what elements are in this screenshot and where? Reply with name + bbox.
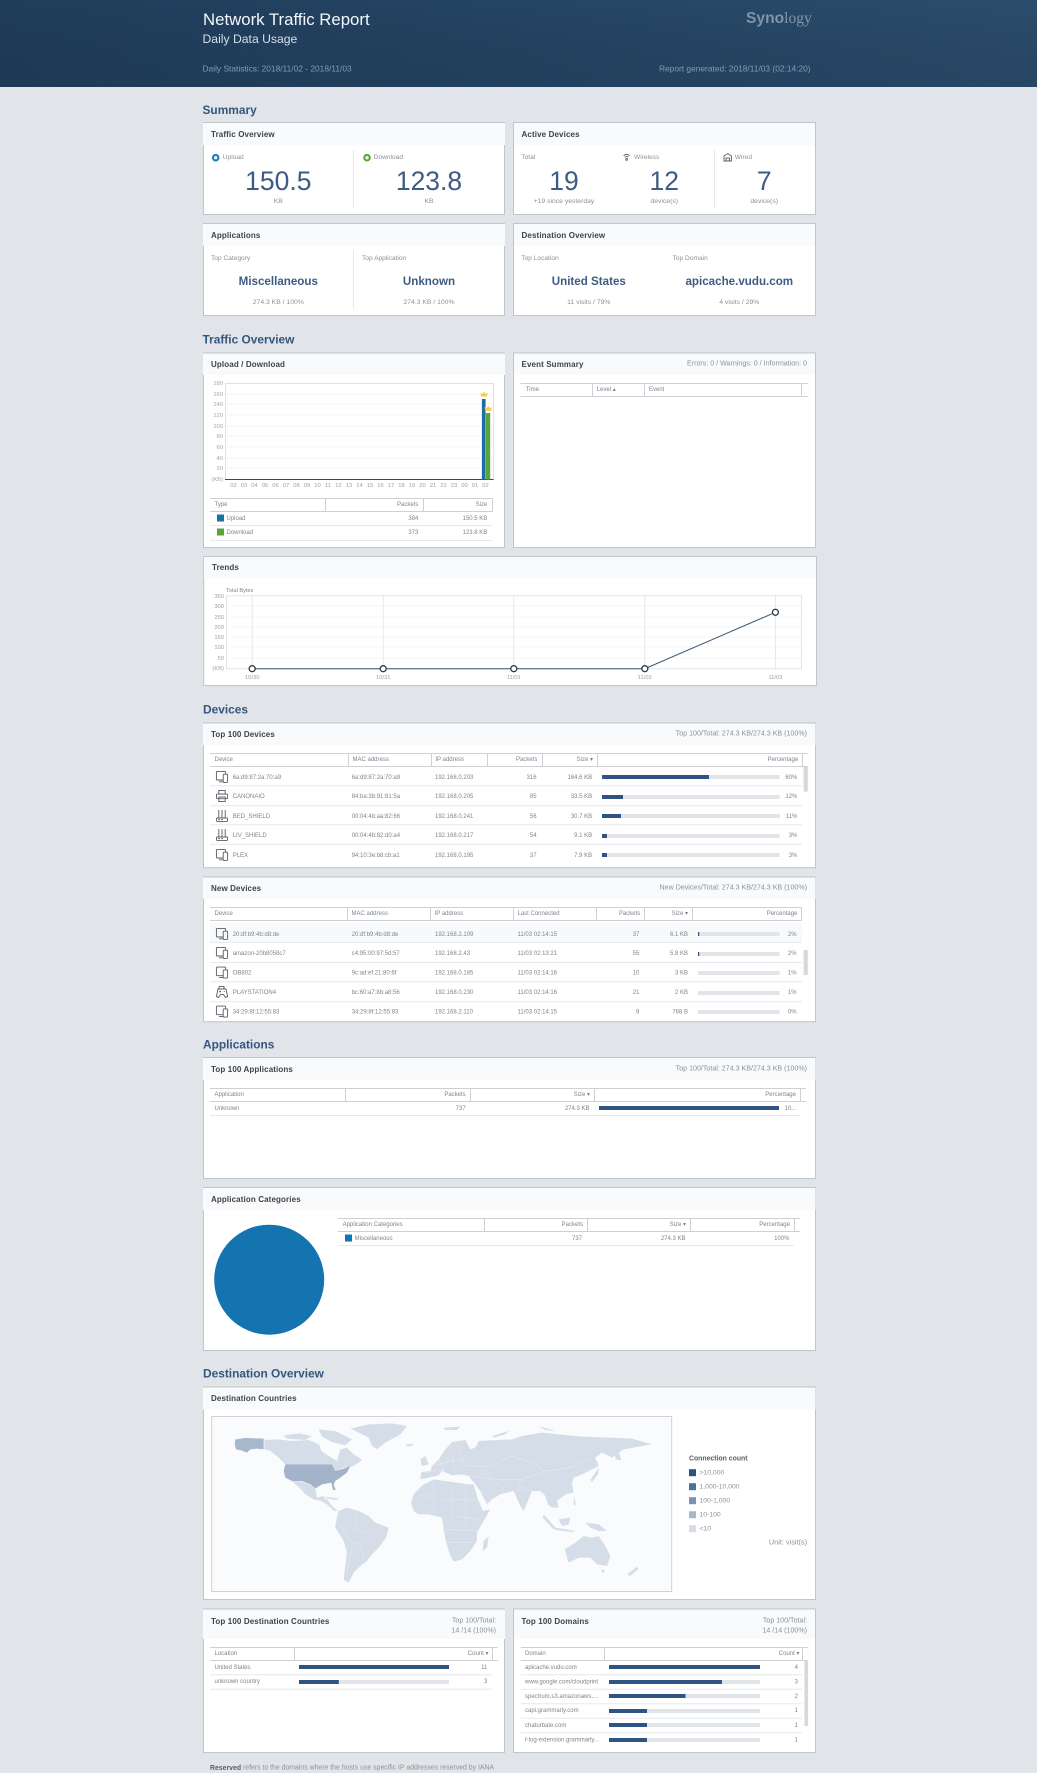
bar chart: upload and download: 60: [217, 445, 223, 451]
table: categories: Application Categories: [343, 1222, 403, 1228]
table: applications: [210, 1088, 806, 1116]
panel: Application Categories: [203, 1188, 816, 1350]
row: 20:df:b9:4b:d8:de: 20:df:b9:4b:d8:de: [233, 932, 280, 938]
row: 34:29:8f:12:55:83: 9: [636, 1010, 640, 1016]
table: domains: 1: [795, 1737, 799, 1743]
bar chart: upload and download: 16: [377, 483, 384, 489]
table: new devices: Percentage: [767, 911, 798, 917]
table: countries: 11: [481, 1665, 488, 1671]
bar chart: upload and download: 180: [213, 381, 223, 387]
bar chart: upload and download: [211, 381, 494, 489]
row: 6a:d9:87:2a:70:a9: 164.6 KB: [568, 775, 592, 781]
bar chart: upload and download: 160: [213, 392, 223, 398]
table: countries: United States: [214, 1665, 251, 1671]
table: countries: Location: [214, 1651, 237, 1657]
panel: Destination Overview summary: Top Location: [521, 255, 559, 262]
panel: Traffic Overview summary: Traffic Overview: [211, 130, 275, 139]
table: domains: 1: [795, 1723, 799, 1729]
row: 20:df:b9:4b:d8:de: 6.1 KB: [670, 932, 688, 938]
panel: Destination Overview summary: Top Domain: [673, 255, 708, 262]
row: PLAYSTATION4: [216, 986, 797, 997]
panel: New Devices: New Devices/Total: 274.3 KB/274.3 KB (100%): [660, 884, 807, 892]
bar chart: upload and download: 17: [388, 483, 394, 489]
bar chart: upload and download: 120: [213, 413, 223, 419]
panel: Traffic Overview summary: KB: [424, 198, 434, 205]
row: CANONAIO: [216, 790, 798, 802]
row: amazon-20b8058c7: c4:95:00:97:5d:57: [352, 951, 400, 957]
table: top devices: [210, 754, 808, 860]
row: amazon-20b8058c7: 192.168.2.43: [435, 951, 471, 957]
section heading: Summary: Summary: [202, 103, 257, 117]
table: applications: Unknown: [214, 1106, 240, 1112]
row: amazon-20b8058c7: 55: [633, 951, 640, 957]
line chart: total bytes: 50: [218, 656, 224, 662]
row: 6a:d9:87:2a:70:a9: 316: [527, 775, 537, 781]
panel: Active Devices: 19: [549, 166, 579, 196]
line chart: total bytes: 11/03: [768, 675, 782, 681]
bar chart: upload and download: 13: [346, 483, 352, 489]
row: CANONAIO: 192.168.0.205: [435, 794, 474, 800]
world map: [212, 1416, 672, 1592]
row: amazon-20b8058c7: 5.8 KB: [670, 951, 688, 957]
row: 34:29:8f:12:55:83: 0%: [788, 1010, 797, 1016]
table: domains: capi.grammarly.com: [525, 1708, 579, 1714]
bar chart: upload and download: 01: [472, 483, 478, 489]
map legend: 10-100: [700, 1511, 721, 1518]
table: upload download totals: [210, 498, 493, 540]
table: top devices: MAC address: [352, 757, 389, 763]
table: events: Event: [649, 387, 665, 393]
row: PLEX: PLEX: [233, 853, 248, 859]
row: PLEX: 192.168.0.195: [435, 853, 474, 859]
line chart: total bytes: 250: [214, 615, 224, 621]
panel: Active Devices: Wired: [735, 154, 752, 161]
table: applications: 274.3 KB: [565, 1106, 590, 1112]
row: PLEX: 7.9 KB: [574, 853, 592, 859]
row: OB802: OB802: [233, 971, 252, 977]
panel: Top 100 Applications: Top 100/Total: 274.3 KB/274.3 KB (100%): [676, 1065, 807, 1073]
table: categories: [338, 1218, 800, 1246]
row: 34:29:8f:12:55:83: 788 B: [672, 1010, 688, 1016]
panel: Top 100 Applications: [203, 1058, 816, 1178]
bar chart: upload and download: 40: [217, 456, 223, 462]
bar chart: upload and download: 20: [217, 466, 223, 472]
table: new devices: IP address: [435, 911, 463, 917]
panel: Destination Overview summary: 11 visits / 79%: [567, 299, 610, 306]
table: categories: Packets: [562, 1222, 583, 1228]
section heading: Destination Overview: Destination Overview: [203, 1367, 325, 1381]
subtitle: Daily Data Usage: [202, 32, 298, 46]
panel: Event Summary: Errors: 0 / Warnings: 0 / Information: 0: [687, 360, 807, 368]
panel: Application Categories: Application Categories: [211, 1195, 301, 1204]
panel: Event Summary: [514, 353, 816, 548]
panel: Top 100 Devices: Top 100 Devices: [211, 730, 275, 739]
panel: Traffic Overview summary: Download: [374, 154, 403, 161]
panel: Destination Overview summary: 4 visits / 29%: [719, 299, 759, 306]
panel: Applications summary: Applications: [211, 231, 261, 240]
line chart: total bytes: (KB): [212, 666, 224, 672]
line chart: total bytes: 200: [214, 625, 224, 631]
row: CANONAIO: CANONAIO: [233, 794, 265, 800]
table: events: Level ▴: [597, 387, 616, 393]
panel: Upload / Download: [203, 353, 505, 548]
panel: Active Devices: device(s): [750, 198, 778, 205]
row: 6a:d9:87:2a:70:a9: [216, 771, 798, 782]
panel: Traffic Overview summary: 150.5: [245, 166, 311, 196]
table: domains: f-log-extension.grammarly...: [525, 1737, 599, 1743]
row: 34:29:8f:12:55:83: 34:29:8f:12:55:83: [233, 1010, 280, 1016]
table: top devices: Device: [214, 757, 234, 763]
panel: Traffic Overview summary: Upload: [223, 154, 244, 161]
bar chart: upload and download: 02: [482, 483, 489, 489]
panel: Applications summary: Top Application: [362, 255, 407, 262]
table: countries: 3: [484, 1679, 488, 1685]
row: OB802: 9c:ad:ef:21:80:6f: [352, 971, 397, 977]
row: LIV_SHIELD: LIV_SHIELD: [233, 833, 267, 839]
table: domains: Domain: [525, 1651, 546, 1657]
table: domains: chaturbate.com: [525, 1723, 566, 1729]
row: OB802: 192.168.0.185: [435, 971, 474, 977]
row: OB802: 3 KB: [675, 971, 688, 977]
row: amazon-20b8058c7: amazon-20b8058c7: [233, 951, 286, 957]
bar chart: upload and download: 06: [272, 483, 279, 489]
table: applications: Packets: [444, 1092, 466, 1098]
row: amazon-20b8058c7: 2%: [788, 951, 797, 957]
row: PLAYSTATION4: 1%: [788, 990, 797, 996]
bar chart: upload and download: 10: [314, 483, 321, 489]
table: applications: Percentage: [765, 1092, 797, 1098]
bar chart: upload and download: 100: [213, 424, 223, 430]
pie chart: [214, 1225, 324, 1335]
table: upload download totals: 373: [408, 530, 419, 536]
report generated time: Report generated: 2018/11/03 (02:14:20): [659, 63, 811, 73]
bar chart: upload and download: 03: [241, 483, 247, 489]
row: 20:df:b9:4b:d8:de: 192.168.2.109: [435, 932, 474, 938]
bar chart: upload and download: 05: [262, 483, 268, 489]
row: PLEX: 94:10:3e:b8:cb:a1: [352, 853, 400, 859]
row: amazon-20b8058c7: [216, 947, 797, 958]
table: upload download totals: Download: [226, 530, 253, 536]
row: 20:df:b9:4b:d8:de: [216, 928, 797, 939]
bar chart: upload and download: 11: [325, 483, 331, 489]
table: categories: 274.3 KB: [661, 1236, 686, 1242]
row: CANONAIO: 85: [530, 794, 537, 800]
table: domains: apicache.vudu.com: [525, 1665, 577, 1671]
row: 34:29:8f:12:55:83: 192.168.2.110: [435, 1010, 474, 1016]
footnote: Reserved refers to the domains where the hosts use specific IP addresses reserved by IANA: [210, 1764, 494, 1772]
table: categories: 737: [572, 1236, 583, 1242]
panel: Active Devices: Active Devices: [522, 130, 580, 139]
panel: Destination Overview summary: United States: [552, 275, 626, 288]
line chart: total bytes: 300: [214, 604, 224, 610]
panel: Traffic Overview summary: [203, 122, 505, 214]
table: upload download totals: Packets: [397, 502, 418, 508]
table: upload download totals: Upload: [226, 516, 246, 522]
row: PLEX: 37: [530, 853, 537, 859]
panel: Top 100 Destination Countries: Top 100 Destination Countries: [211, 1617, 330, 1626]
bar chart: upload and download: 19: [409, 483, 415, 489]
table: upload download totals: Size: [476, 502, 488, 508]
panel: Active Devices: [514, 122, 816, 214]
row: LIV_SHIELD: 3%: [789, 833, 798, 839]
row: 20:df:b9:4b:d8:de: 2%: [788, 932, 797, 938]
panel: Top 100 Domains: Top 100 Domains: [522, 1617, 589, 1626]
table: domains: 1: [795, 1708, 799, 1714]
line chart: total bytes: [212, 588, 802, 681]
panel: Applications summary: 274.3 KB / 100%: [253, 299, 304, 306]
panel: Top 100 Domains: [514, 1609, 816, 1752]
row: BED_SHIELD: 11%: [786, 814, 798, 820]
row: LIV_SHIELD: 9.1 KB: [574, 833, 592, 839]
panel: Top 100 Destination Countries: [203, 1609, 505, 1752]
row: PLAYSTATION4: 11/03 02:14:16: [518, 990, 558, 996]
table: categories: Percentage: [759, 1222, 791, 1228]
section heading: Devices: Devices: [203, 702, 248, 716]
table: top devices: Packets: [516, 757, 537, 763]
row: 34:29:8f:12:55:83: 34:29:8f:12:55:83: [352, 1010, 399, 1016]
row: LIV_SHIELD: 00:04:4b:82:d0:a4: [352, 833, 401, 839]
line chart: total bytes: 350: [214, 594, 224, 600]
panel: New Devices: [203, 877, 816, 1022]
table: new devices: Last Connected: [518, 911, 560, 917]
panel: Top 100 Destination Countries: Top 100/Total:: [452, 1617, 496, 1625]
table: domains: www.google.com/cloudprint: [524, 1679, 598, 1685]
row: 20:df:b9:4b:d8:de: 20:df:b9:4b:d8:de: [352, 932, 399, 938]
map legend: >10,000: [700, 1469, 724, 1476]
table: events: [520, 384, 808, 396]
table: new devices: [210, 908, 808, 1017]
bar chart: upload and download: 07: [283, 483, 289, 489]
panel: Traffic Overview summary: KB: [274, 198, 283, 205]
report banner: [0, 0, 1037, 87]
table: countries: unknown country: [214, 1679, 260, 1685]
panel: Traffic Overview summary: 123.8: [396, 166, 462, 196]
line chart: total bytes: 10/31: [376, 675, 390, 681]
panel: Trends: [204, 556, 816, 686]
table: countries: [210, 1648, 498, 1689]
map legend: 100-1,000: [700, 1497, 730, 1504]
line chart: total bytes: 11/01: [507, 675, 521, 681]
bar chart: upload and download: 140: [213, 402, 223, 408]
row: CANONAIO: 33.5 KB: [571, 794, 592, 800]
row: PLAYSTATION4: PLAYSTATION4: [233, 990, 277, 996]
row: PLEX: 3%: [789, 853, 798, 859]
row: 6a:d9:87:2a:70:a9: 60%: [785, 775, 798, 781]
line chart: total bytes: Total Bytes: [226, 588, 254, 594]
row: PLAYSTATION4: bc:60:a7:8b:a8:56: [352, 990, 400, 996]
line chart: total bytes: 11/02: [638, 675, 652, 681]
row: LIV_SHIELD: 192.168.0.217: [435, 833, 474, 839]
row: PLAYSTATION4: 21: [633, 990, 640, 996]
logo: Synology: Synology: [746, 10, 812, 26]
bar chart: upload and download: 02: [230, 483, 237, 489]
row: 34:29:8f:12:55:83: [216, 1006, 797, 1017]
row: OB802: 10: [633, 971, 640, 977]
panel: Destination Countries: [203, 1387, 816, 1600]
panel: Active Devices: Total: [521, 154, 536, 161]
panel: Top 100 Domains: Top 100/Total:: [763, 1617, 807, 1625]
table: domains: 3: [795, 1679, 799, 1685]
row: BED_SHIELD: BED_SHIELD: [233, 814, 271, 820]
table: events: Time: [526, 387, 540, 393]
bar chart: upload and download: 22: [440, 483, 447, 489]
table: countries: Count ▾: [468, 1651, 488, 1657]
line chart: total bytes: 10/30: [245, 675, 259, 681]
panel: Active Devices: device(s): [651, 198, 678, 205]
table: categories: Miscellaneous: [355, 1236, 393, 1242]
table: domains: Count ▾: [779, 1651, 800, 1657]
panel: Applications summary: Miscellaneous: [239, 275, 318, 288]
panel: Destination Countries: Destination Countries: [211, 1394, 297, 1403]
panel: Active Devices: 7: [757, 166, 772, 196]
bar chart: upload and download: 20: [419, 483, 426, 489]
bar chart: upload and download: 15: [367, 483, 373, 489]
panel: Top 100 Domains: 14 /14 (100%): [762, 1627, 807, 1635]
bar chart: upload and download: (KB): [211, 477, 223, 483]
row: LIV_SHIELD: 54: [530, 833, 537, 839]
bar chart: upload and download: 08: [293, 483, 300, 489]
bar chart: upload and download: 21: [430, 483, 436, 489]
table: categories: 100%: [774, 1236, 790, 1242]
panel: Applications summary: [203, 224, 505, 316]
section heading: Applications: Applications: [203, 1037, 275, 1051]
icon: peak crown: [480, 392, 492, 411]
table: top devices: Size ▾: [577, 757, 593, 763]
bar chart: upload and download: 00: [461, 483, 468, 489]
panel: Top 100 Applications: Top 100 Applications: [211, 1065, 293, 1074]
map legend: 1,000-10,000: [700, 1483, 740, 1490]
panel: Active Devices: +19 since yesterday: [534, 198, 595, 205]
table: domains: spectrum.s3.amazonaws....: [525, 1694, 598, 1700]
table: applications: Application: [214, 1092, 244, 1098]
bar chart: upload and download: 04: [251, 483, 258, 489]
table: upload download totals: 150.5 KB: [463, 516, 487, 522]
statistics date range: Daily Statistics: 2018/11/02 - 2018/11/03: [202, 63, 352, 73]
table: applications: 10...: [784, 1106, 797, 1112]
row: BED_SHIELD: 192.168.0.241: [435, 814, 474, 820]
title: Network Traffic Report: [203, 10, 370, 29]
row: CANONAIO: 84:ba:3b:91:81:5a: [352, 794, 401, 800]
row: amazon-20b8058c7: 11/03 02:13:21: [518, 951, 558, 957]
row: CANONAIO: 12%: [785, 794, 798, 800]
bar chart: upload and download: 23: [451, 483, 457, 489]
row: PLAYSTATION4: 2 KB: [675, 990, 688, 996]
panel: Trends: Trends: [212, 563, 239, 572]
row: 6a:d9:87:2a:70:a9: 6a:d9:87:2a:70:a9: [352, 775, 401, 781]
table: new devices: Packets: [619, 911, 640, 917]
row: BED_SHIELD: [216, 810, 798, 821]
row: 20:df:b9:4b:d8:de: 11/03 02:14:15: [518, 932, 558, 938]
row: OB802: 11/03 02:14:16: [518, 971, 558, 977]
panel: Destination Overview summary: apicache.vudu.com: [685, 275, 793, 288]
table: domains: 4: [795, 1665, 799, 1671]
row: OB802: 1%: [788, 971, 797, 977]
panel: Event Summary: Event Summary: [522, 360, 584, 369]
panel: Destination Overview summary: [514, 224, 816, 316]
table: applications: 737: [456, 1106, 466, 1112]
row: 34:29:8f:12:55:83: 11/03 02:14:15: [518, 1010, 558, 1016]
panel: Destination Overview summary: Destination Overview: [522, 231, 606, 240]
row: BED_SHIELD: 30.7 KB: [571, 814, 592, 820]
panel: Applications summary: Unknown: [403, 275, 455, 288]
row: OB802: [216, 967, 797, 978]
map legend: Connection count: [689, 1456, 748, 1462]
table: applications: Size ▾: [574, 1092, 590, 1098]
icon: download: [363, 154, 371, 162]
table: new devices: MAC address: [352, 911, 388, 917]
map legend: [689, 1456, 807, 1546]
row: PLAYSTATION4: 192.168.0.230: [435, 990, 474, 996]
map legend: <10: [700, 1525, 711, 1532]
table: categories: Size ▾: [670, 1222, 686, 1228]
panel: Top 100 Devices: [203, 723, 816, 868]
table: top devices: IP address: [435, 757, 464, 763]
table: new devices: Device: [214, 911, 234, 917]
row: BED_SHIELD: 56: [530, 814, 537, 820]
bar chart: upload and download: 14: [356, 483, 363, 489]
table: domains: 2: [795, 1694, 799, 1700]
row: 6a:d9:87:2a:70:a9: 192.168.0.203: [435, 775, 474, 781]
panel: Active Devices: 12: [650, 166, 679, 196]
row: BED_SHIELD: 00:04:4b:aa:82:66: [352, 814, 401, 820]
icon: wired: [724, 154, 731, 161]
table: upload download totals: Type: [214, 502, 228, 508]
panel: Upload / Download: Upload / Download: [211, 360, 285, 369]
map legend: Unit: visit(s): [769, 1537, 807, 1546]
table: top devices: Percentage: [767, 757, 799, 763]
bar chart: upload and download: 12: [335, 483, 342, 489]
row: PLEX: [216, 849, 798, 860]
section heading: Traffic Overview: Traffic Overview: [202, 332, 295, 346]
panel: Applications summary: 274.3 KB / 100%: [403, 299, 455, 306]
panel: New Devices: New Devices: [211, 884, 262, 893]
table: new devices: Size ▾: [672, 911, 688, 917]
row: LIV_SHIELD: [216, 829, 798, 840]
bar chart: upload and download: 09: [304, 483, 310, 489]
panel: Active Devices: Wireless: [634, 154, 660, 161]
panel: Top 100 Destination Countries: 14 /14 (100%): [451, 1627, 496, 1635]
icon: upload: [212, 154, 220, 162]
panel: Top 100 Devices: Top 100/Total: 274.3 KB/274.3 KB (100%): [676, 730, 807, 738]
panel: Applications summary: Top Category: [211, 255, 251, 262]
row: 20:df:b9:4b:d8:de: 37: [633, 932, 640, 938]
line chart: total bytes: 150: [214, 635, 224, 641]
table: domains: [521, 1648, 808, 1744]
table: upload download totals: 384: [408, 516, 419, 522]
row: 6a:d9:87:2a:70:a9: 6a:d9:87:2a:70:a9: [233, 775, 282, 781]
line chart: total bytes: 100: [214, 645, 224, 651]
bar chart: upload and download: 80: [217, 434, 223, 440]
bar chart: upload and download: 18: [398, 483, 405, 489]
table: upload download totals: 123.8 KB: [463, 530, 487, 536]
icon: wireless: [624, 154, 630, 160]
